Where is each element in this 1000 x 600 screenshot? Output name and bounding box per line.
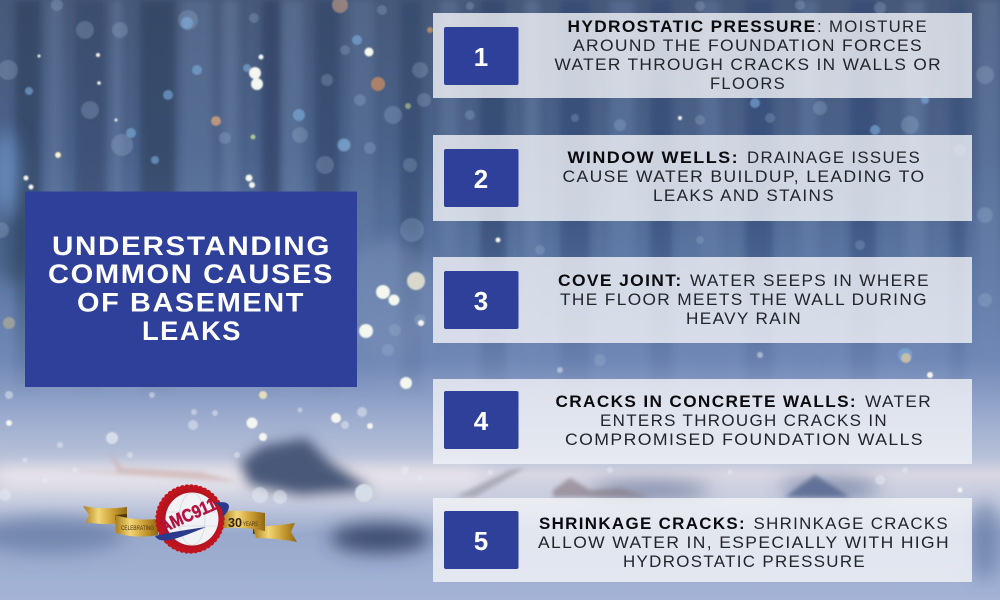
text: cove joint: HEAVY RAIN: [686, 310, 802, 328]
text: shrinkage cracks: SHRINKAGE CRACKS: [754, 515, 949, 533]
text: cove joint: THE FLOOR MEETS THE WALL DURING: [560, 291, 928, 309]
bokeh: bright white: [6, 48, 962, 502]
panel: title: [25, 192, 357, 387]
text: cove joint: COVE JOINT:: [558, 272, 682, 290]
right ribbon: 30: [228, 515, 242, 530]
text: shrinkage cracks: [538, 515, 950, 571]
heading: title text: [48, 231, 334, 346]
panel: cause 1: [433, 13, 972, 98]
number badge 3: 3: [474, 286, 488, 316]
number badge 1: 1: [474, 42, 488, 72]
text: window wells: CAUSE WATER BUILDUP, LEADING TO: [562, 168, 926, 186]
glows and soft lower shapes: [0, 130, 999, 580]
text: cracks in concrete walls: WATER: [865, 393, 932, 411]
heading: title text: COMMON CAUSES: [48, 259, 334, 289]
red rosette seal: [158, 487, 222, 551]
heading: title text: UNDERSTANDING: [52, 231, 331, 261]
bokeh: warm: [3, 0, 911, 363]
bokeh: soft blue and grey: [0, 0, 994, 366]
number badge 4: 4: [474, 406, 489, 436]
heading: title text: OF BASEMENT: [77, 288, 305, 318]
text: window wells: WINDOW WELLS:: [568, 149, 739, 167]
text: shrinkage cracks: HYDROSTATIC PRESSURE: [623, 553, 866, 571]
text: cracks in concrete walls: [556, 393, 932, 449]
text: window wells: LEAKS AND STAINS: [653, 187, 835, 205]
right ribbon: YEARS: [243, 522, 258, 528]
number badge 2: [444, 149, 518, 207]
blue swoosh: [155, 502, 229, 540]
text: shrinkage cracks: SHRINKAGE CRACKS:: [539, 515, 746, 533]
text: cracks in concrete walls: COMPROMISED FOUNDATION WALLS: [565, 431, 924, 449]
panel: cause 5: [433, 498, 972, 582]
logo: AMC911 celebrating 30 years: [83, 487, 297, 551]
number badge 5: [444, 511, 518, 569]
right ribbon: [222, 511, 297, 542]
left ribbon: [83, 506, 158, 537]
text: cove joint: [558, 272, 930, 328]
text: cracks in concrete walls: ENTERS THROUGH CRACKS IN: [600, 412, 888, 430]
text: hydrostatic pressure: AROUND THE FOUNDATION FORCES: [573, 37, 923, 55]
text: window wells: [562, 149, 926, 205]
text: hydrostatic pressure: WATER THROUGH CRACKS IN WALLS OR: [554, 56, 942, 74]
text: hydrostatic pressure: FLOORS: [710, 75, 786, 93]
AMC911 wordmark: AMC911: [156, 494, 219, 537]
text: hydrostatic pressure: : MOISTURE: [817, 18, 928, 36]
number badge 3: [444, 271, 518, 329]
text: cracks in concrete walls: CRACKS IN CONCRETE WALLS:: [556, 393, 857, 411]
bokeh: saturated blue: [25, 17, 929, 362]
heading: title text: LEAKS: [142, 316, 242, 346]
panel: cause 3: [433, 257, 972, 343]
rock: [240, 438, 372, 495]
text: hydrostatic pressure: [554, 18, 942, 93]
panel: cause 2: [433, 135, 972, 221]
text: hydrostatic pressure: HYDROSTATIC PRESSURE: [568, 18, 816, 36]
text: cove joint: WATER SEEPS IN WHERE: [690, 272, 930, 290]
number badge 1: [444, 27, 518, 85]
left ribbon: CELEBRATING: [121, 525, 154, 532]
number badge 4: [444, 391, 518, 449]
panel: cause 4: [433, 379, 972, 464]
number badge 2: 2: [474, 164, 488, 194]
bokeh: pale sparkles, lower field: [0, 352, 908, 504]
wet leaf streak: [60, 452, 238, 482]
text: window wells: DRAINAGE ISSUES: [747, 149, 921, 167]
number badge 5: 5: [474, 526, 488, 556]
text: shrinkage cracks: ALLOW WATER IN, ESPECIALLY WITH HIGH: [538, 534, 950, 552]
